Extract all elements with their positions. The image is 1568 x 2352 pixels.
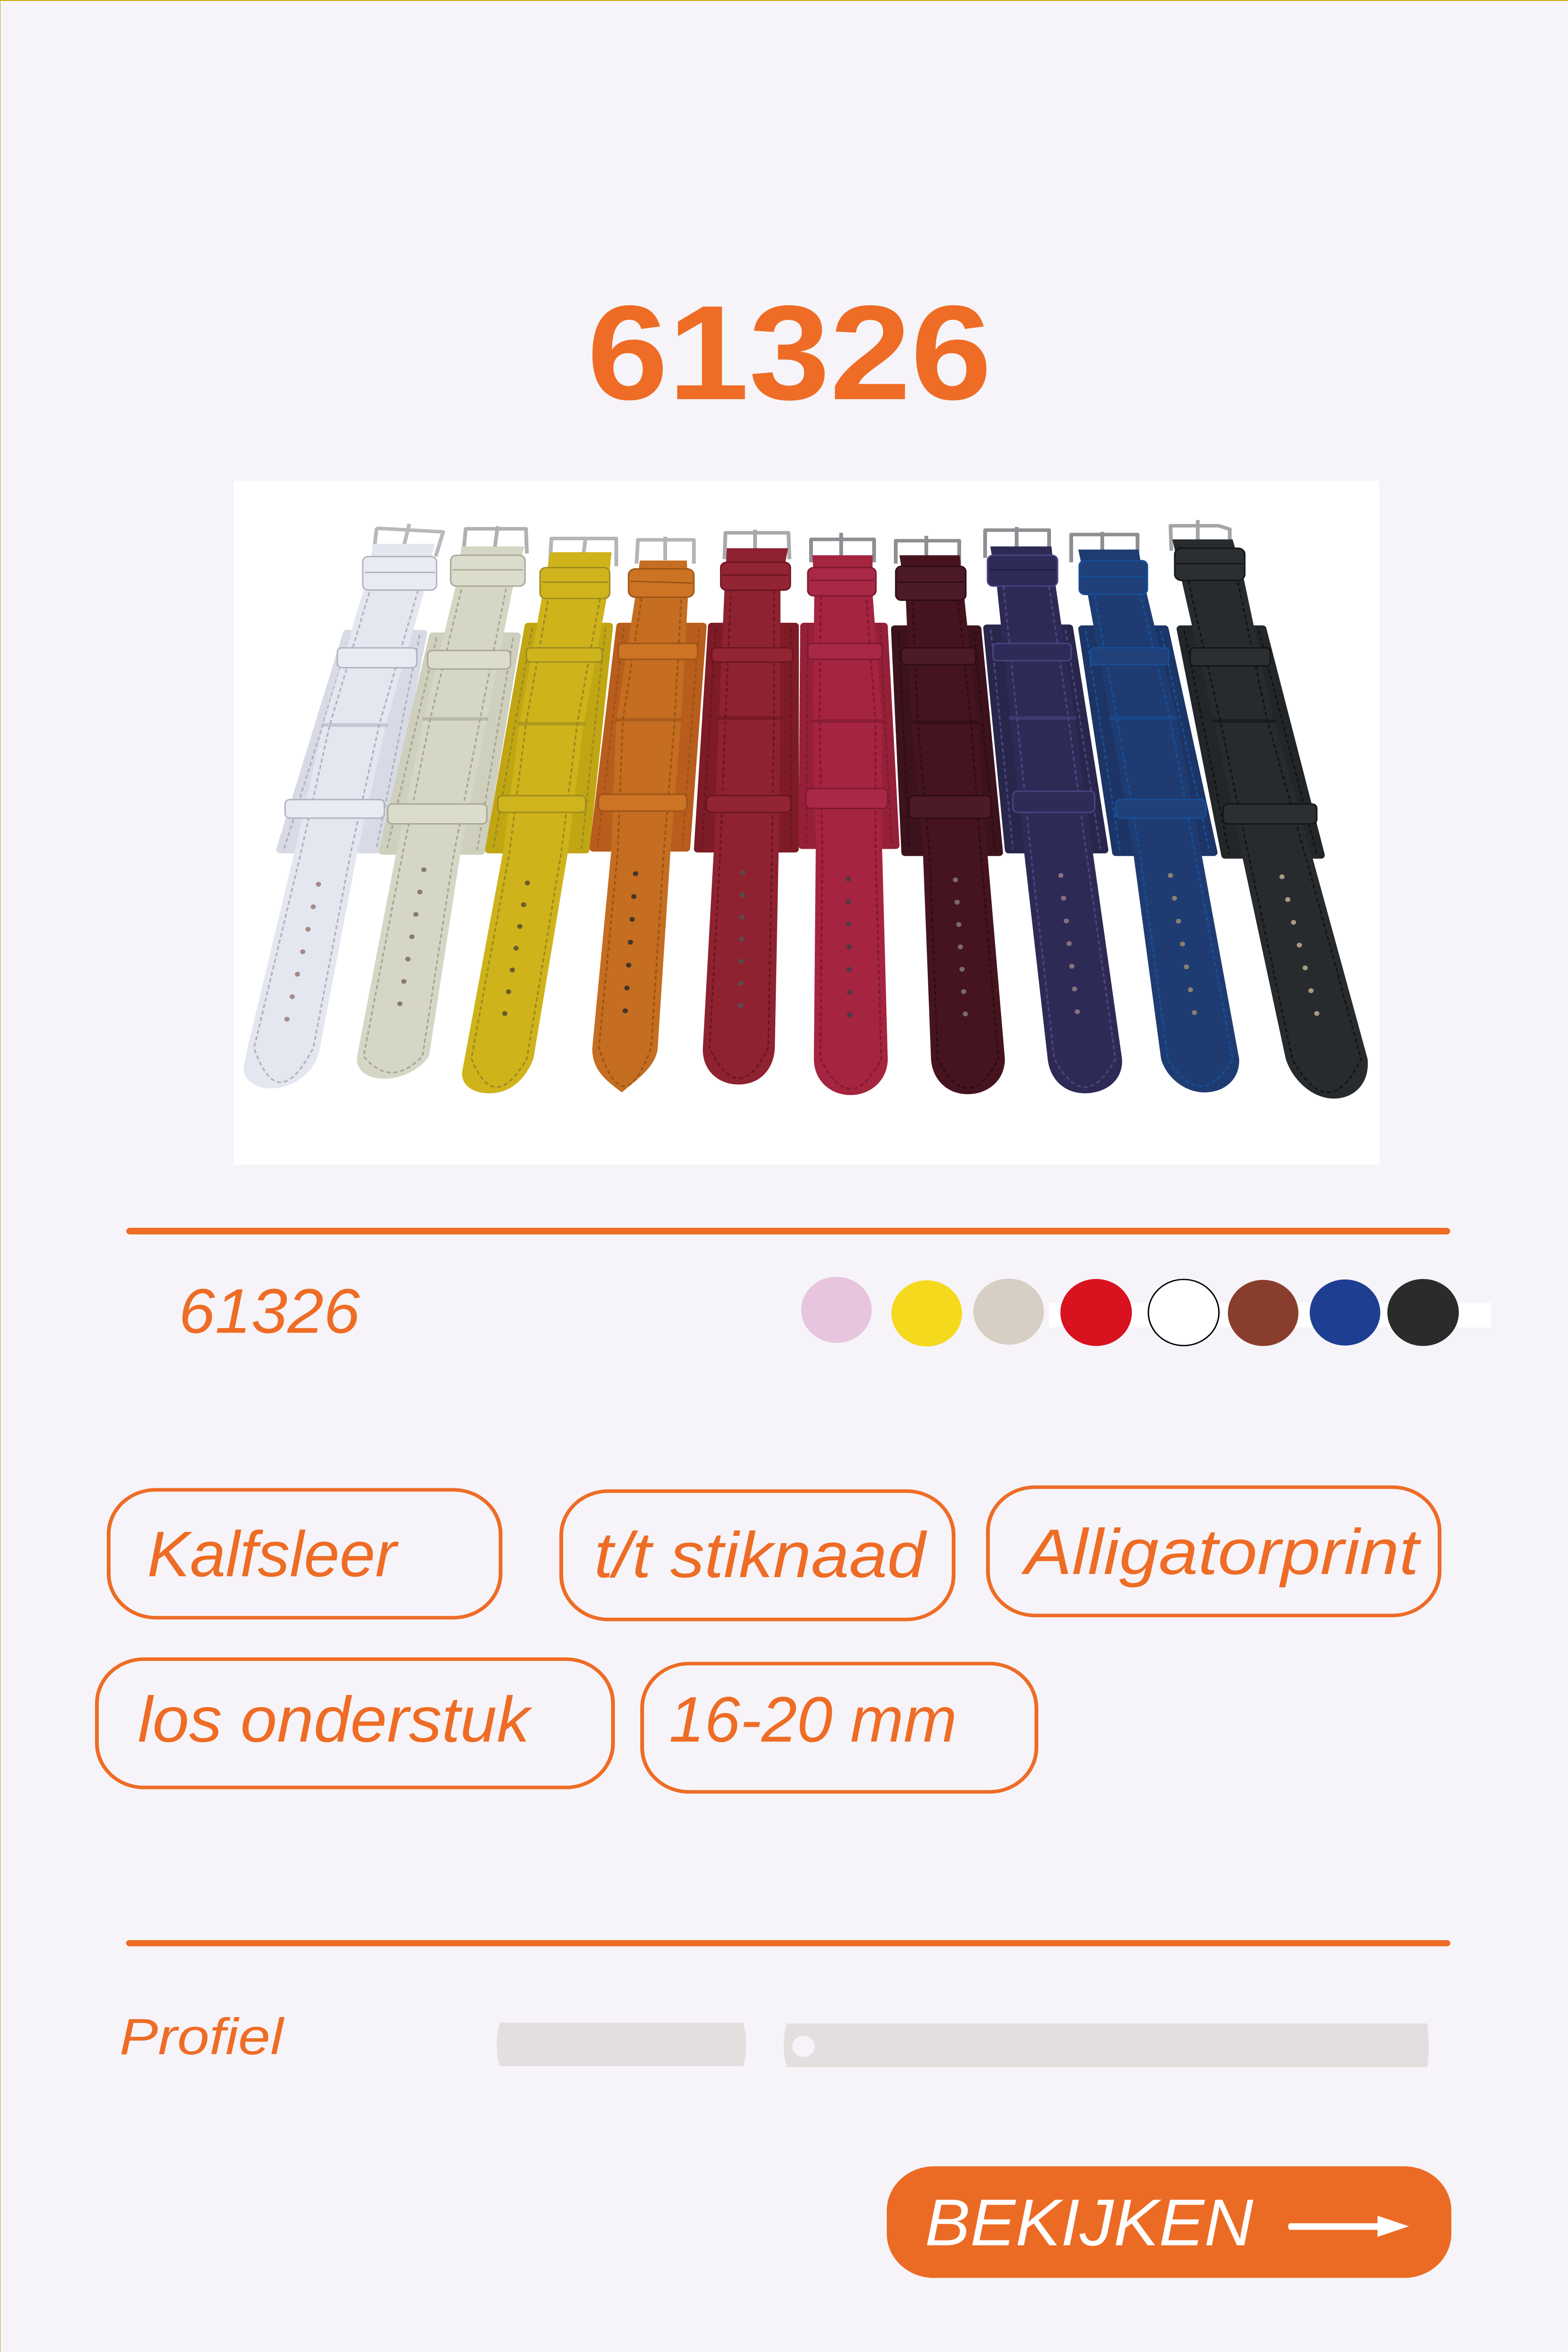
product photo: ten watch straps: [234, 481, 1379, 1165]
strap: maroon: [895, 536, 1005, 1094]
tag: 16-20 mm: [642, 1663, 1036, 1792]
strap: cream: [357, 526, 527, 1079]
colour swatches: [801, 1277, 1491, 1346]
tag: t/t stiknaad: [561, 1491, 954, 1620]
strap: orange: [592, 537, 703, 1092]
tag: los onderstuk: los onderstuk: [138, 1684, 533, 1755]
article number: 61326: [179, 1276, 360, 1346]
strap: raspberry: [802, 533, 896, 1095]
tag: Alligatorprint: Alligatorprint: [1021, 1516, 1422, 1588]
title: 61326: [587, 277, 992, 428]
tag: Kalfsleer: [109, 1490, 501, 1618]
tag: t/t stiknaad: t/t stiknaad: [594, 1519, 927, 1591]
strap: yellow: [462, 537, 616, 1093]
tag: Kalfsleer: Kalfsleer: [147, 1518, 399, 1590]
strap: blue: [1071, 532, 1239, 1092]
profile shape: long piece with hole: [784, 2024, 1429, 2067]
profile label: Profiel: [119, 2008, 285, 2065]
strap: dark red: [698, 530, 795, 1084]
profile shape: short piece: [497, 2023, 746, 2066]
tag: los onderstuk: [97, 1659, 613, 1788]
tag: 16-20 mm: 16-20 mm: [669, 1684, 957, 1755]
icon: arrow: [1288, 2216, 1409, 2237]
tag: Alligatorprint: [988, 1487, 1440, 1615]
button: BEKIJKEN: BEKIJKEN: [925, 2185, 1254, 2259]
strap: white: [244, 524, 443, 1089]
button: BEKIJKEN: [887, 2166, 1451, 2278]
strap: black: [1170, 520, 1368, 1098]
strap: navy purple: [985, 527, 1122, 1093]
